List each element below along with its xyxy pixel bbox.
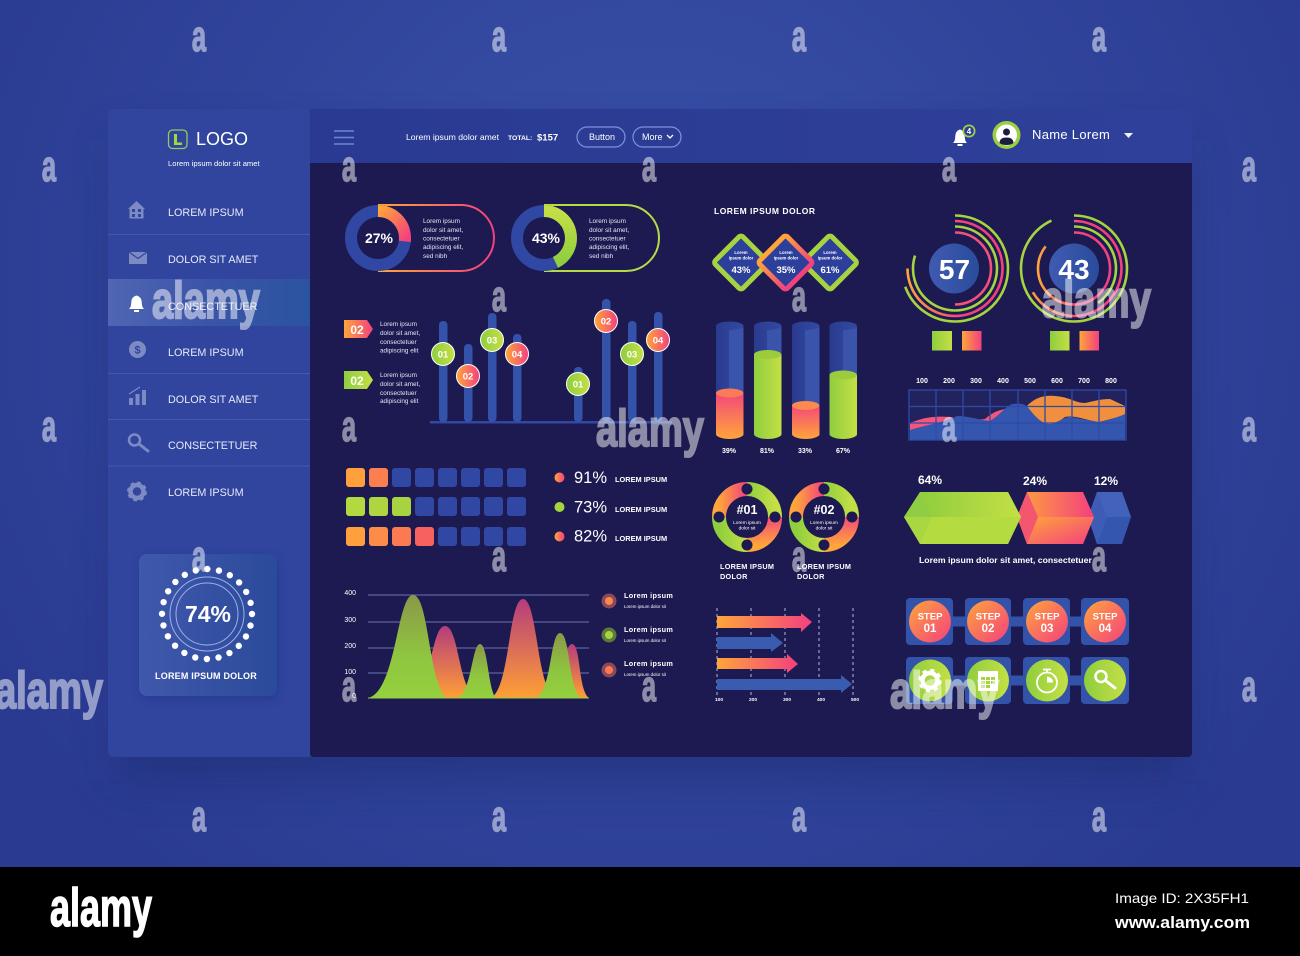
nav item: settings	[128, 483, 244, 500]
watermark: a	[942, 401, 957, 451]
icon tiles	[906, 657, 1129, 704]
grid area chart: 600	[1051, 378, 1063, 385]
lollipop bar chart: 03	[487, 336, 497, 346]
watermark: a	[642, 661, 657, 711]
arrow bar chart: 500	[851, 697, 859, 703]
donut description: dolor sit amet,	[589, 227, 629, 234]
nav highlight	[108, 279, 310, 326]
watermark: a	[342, 141, 357, 191]
donut card: 43%	[517, 205, 659, 271]
hexagon proportion bar: 12%	[1094, 474, 1118, 488]
diamonds: ipsum dolor	[818, 256, 843, 260]
button	[577, 127, 625, 147]
panel: top bar	[310, 109, 1192, 163]
cylinder chart: 39%	[722, 448, 737, 455]
legend tag: green 02: dolor sit amet,	[380, 381, 420, 388]
watermark: alamy	[596, 400, 704, 458]
icon: search	[1096, 671, 1115, 688]
gauge swatches	[1050, 331, 1099, 350]
panel: main dashboard area	[310, 150, 1192, 757]
ring: #01: #01	[737, 503, 757, 517]
hexagon proportion bar	[904, 473, 1131, 544]
nav item: dollar: $	[134, 344, 141, 356]
donut description: sed nibh	[589, 253, 614, 260]
logo: LOGO	[196, 129, 248, 149]
step tiles: 03	[1041, 623, 1053, 635]
diamonds: ipsum dolor	[774, 256, 799, 260]
progress legend	[554, 469, 667, 546]
nav item: chart	[129, 387, 259, 406]
total	[508, 132, 558, 144]
hexagon caption: Lorem ipsum dolor sit amet, consectetuer	[919, 555, 1092, 565]
nav item: bell active: CONSECTETUER	[168, 301, 258, 313]
button: more	[633, 127, 681, 147]
watermark: a	[642, 141, 657, 191]
progress legend: 91%	[574, 469, 607, 487]
total: $157	[537, 132, 558, 144]
watermark: a	[1242, 401, 1257, 451]
footer bar: Image ID: 2X35FH1	[1115, 890, 1249, 906]
donut description	[423, 218, 463, 260]
step tiles: STEP	[918, 612, 943, 622]
donut description: consectetuer	[589, 236, 626, 242]
ring: #01: Lorem ipsum	[733, 520, 761, 526]
diamonds	[713, 235, 858, 290]
grid area chart: 300	[970, 378, 982, 385]
nav item: home	[128, 201, 244, 219]
watermark: alamy	[152, 272, 260, 330]
nav item: mail: DOLOR SIT AMET	[168, 254, 259, 266]
grid area chart: 200	[943, 378, 955, 385]
icon: dropdown caret	[1124, 133, 1133, 138]
gauge swatches	[932, 331, 982, 350]
grid area chart: 800	[1105, 378, 1117, 385]
diamonds: 61%	[820, 265, 840, 276]
step tiles: 02	[982, 623, 994, 635]
watermark: a	[192, 531, 207, 581]
nav item: search	[129, 434, 258, 452]
lollipop bar chart: 01	[438, 350, 449, 360]
icon: stopwatch	[1037, 670, 1057, 692]
area chart legend	[602, 591, 673, 678]
cylinder chart: 67%	[836, 448, 851, 455]
grid area chart: 100	[916, 378, 928, 385]
nav item: search: CONSECTETUER	[168, 440, 258, 452]
icon: gear	[920, 670, 940, 690]
watermark: a	[792, 11, 807, 61]
arrow bar chart: 200	[749, 697, 757, 703]
step tiles	[906, 598, 1129, 645]
area chart legend: Lorem ipsum	[624, 659, 673, 668]
donut description: dolor sit amet,	[423, 227, 463, 234]
area chart legend: Lorem ipsum dolor sit	[624, 604, 667, 609]
footer bar: alamy	[50, 878, 152, 938]
lollipop bar chart	[430, 299, 672, 424]
gauge card	[139, 554, 277, 698]
radial gauge: 43: 43	[1058, 254, 1090, 285]
watermark: alamy	[1042, 271, 1151, 329]
icon: calendar	[978, 671, 998, 691]
radial gauge: 57: 57	[939, 254, 970, 285]
nav item: dollar: LOREM IPSUM	[168, 347, 244, 359]
watermark: a	[192, 791, 207, 841]
arrow bar chart	[715, 608, 859, 703]
gauge card: 74%	[185, 601, 231, 627]
logo tagline: Lorem ipsum dolor sit amet	[168, 159, 260, 168]
ring: #02: #02	[814, 503, 834, 517]
ring labels: LOREM IPSUM	[720, 562, 774, 571]
legend tag: orange 02: adipiscing elit	[380, 348, 419, 354]
watermark: a	[1092, 11, 1107, 61]
radial gauge: 43	[1021, 216, 1127, 322]
logo	[168, 129, 248, 149]
donut description: Lorem ipsum	[589, 218, 626, 225]
diamonds: Lorem	[779, 250, 793, 255]
watermark: a	[342, 661, 357, 711]
ring: #01: dolor sit	[739, 526, 756, 532]
total: TOTAL:	[508, 135, 532, 142]
ring: #01	[714, 484, 780, 550]
grid area chart: 400	[997, 378, 1009, 385]
nav item: dollar	[129, 341, 244, 359]
watermark: a	[1242, 661, 1257, 711]
step tiles: STEP	[1035, 612, 1060, 622]
radial gauge: 57	[902, 216, 1008, 322]
legend tag: green 02: adipiscing elit	[380, 398, 419, 405]
legend tag: green 02: Lorem ipsum	[380, 372, 417, 379]
watermark: a	[492, 791, 507, 841]
footer bar: www.alamy.com	[1114, 913, 1250, 932]
legend tag: green 02	[344, 371, 420, 405]
watermark: alamy	[890, 662, 999, 720]
progress legend: LOREM IPSUM	[615, 534, 667, 543]
ring labels	[720, 562, 851, 581]
area chart: 400	[344, 590, 356, 597]
watermark: a	[342, 401, 357, 451]
donut card: 43%: 43%	[532, 230, 561, 246]
donut description: Lorem ipsum	[423, 218, 460, 225]
icon: notification bell	[953, 124, 976, 146]
donut card: 27%: 27%	[365, 230, 394, 246]
watermark: a	[1092, 791, 1107, 841]
watermark: a	[1092, 531, 1107, 581]
icon: menu	[334, 131, 354, 144]
diamonds: Lorem	[823, 250, 837, 255]
area chart: 300	[344, 617, 356, 624]
hexagon proportion bar: 24%	[1023, 474, 1047, 488]
donut description: sed nibh	[423, 253, 448, 260]
panel: sidebar	[108, 109, 310, 757]
area chart: 100	[344, 669, 356, 676]
watermark: a	[192, 11, 207, 61]
arrow bar chart: 100	[715, 697, 723, 703]
donut description: adipiscing elit,	[423, 244, 463, 251]
legend tag: orange 02: consectetuer	[380, 339, 417, 346]
nav item: settings: LOREM IPSUM	[168, 487, 244, 499]
diamonds: Lorem	[734, 250, 748, 255]
grid area chart	[909, 378, 1126, 440]
area chart legend: Lorem ipsum dolor sit	[624, 672, 667, 677]
step tiles: 04	[1099, 623, 1112, 635]
watermark: a	[1242, 141, 1257, 191]
progress legend: LOREM IPSUM	[615, 475, 667, 484]
watermark: a	[792, 791, 807, 841]
heading: lorem ipsum dolor: LOREM IPSUM DOLOR	[714, 206, 816, 216]
watermark: a	[792, 271, 807, 321]
step tiles: STEP	[976, 612, 1001, 622]
watermark: a	[492, 531, 507, 581]
icon: notification bell: 4	[967, 127, 972, 136]
cylinder chart: 81%	[760, 448, 775, 455]
diamonds: ipsum dolor	[729, 256, 754, 260]
arrow bar chart: 300	[783, 697, 791, 703]
watermark: a	[942, 141, 957, 191]
step tiles: 01	[924, 623, 937, 635]
ring: #02: Lorem ipsum	[810, 520, 838, 526]
nav item: chart: DOLOR SIT AMET	[168, 394, 259, 406]
ring labels: DOLOR	[797, 572, 825, 581]
watermark: a	[792, 531, 807, 581]
donut description: adipiscing elit,	[589, 244, 629, 251]
lollipop bar chart: 04	[653, 336, 664, 346]
legend tag: orange 02: 02	[350, 323, 364, 337]
nav item: bell active	[129, 296, 258, 313]
donut description	[589, 218, 629, 260]
square progress grid	[346, 468, 526, 546]
lollipop bar chart: 03	[627, 350, 637, 360]
diamonds: 43%	[731, 265, 751, 276]
gauge card: LOREM IPSUM DOLOR	[155, 671, 257, 681]
lollipop bar chart: 02	[463, 372, 473, 382]
progress legend: 82%	[574, 528, 607, 546]
area chart: 200	[344, 643, 356, 650]
watermark: a	[492, 271, 507, 321]
cylinder chart	[716, 322, 857, 455]
watermark: a	[42, 141, 57, 191]
top bar summary text: Lorem ipsum dolor amet	[406, 132, 500, 142]
legend tag: orange 02: dolor sit amet,	[380, 330, 420, 337]
area chart	[344, 590, 589, 700]
legend tag: green 02: consectetuer	[380, 390, 417, 397]
watermark: a	[492, 11, 507, 61]
ring labels: DOLOR	[720, 572, 748, 581]
lollipop bar chart: 01	[573, 380, 584, 390]
donut description: consectetuer	[423, 236, 460, 242]
ring labels: LOREM IPSUM	[797, 562, 851, 571]
area chart legend: Lorem ipsum dolor sit	[624, 638, 667, 643]
nav item: mail	[129, 252, 259, 266]
icon: avatar	[992, 121, 1020, 149]
area chart legend: Lorem ipsum	[624, 625, 673, 634]
button: Button	[589, 132, 615, 142]
user name: Name Lorem	[1032, 127, 1110, 142]
diamonds: 35%	[776, 265, 796, 276]
hexagon proportion bar: 64%	[918, 473, 942, 487]
legend tag: green 02: 02	[350, 374, 364, 388]
button: more: More	[642, 132, 663, 142]
step tiles: STEP	[1093, 612, 1118, 622]
lollipop bar chart: 04	[512, 350, 523, 360]
ring: #02: dolor sit	[816, 526, 833, 532]
legend tag: orange 02: Lorem ipsum	[380, 321, 417, 328]
grid area chart: 700	[1078, 378, 1090, 385]
footer bar	[0, 867, 1300, 956]
area chart legend: Lorem ipsum	[624, 591, 673, 600]
lollipop bar chart: 02	[601, 316, 611, 328]
area chart: 0	[352, 693, 356, 700]
progress legend: 73%	[574, 498, 607, 516]
ring: #02	[790, 484, 858, 550]
watermark: a	[42, 401, 57, 451]
arrow bar chart: 400	[817, 697, 825, 703]
grid area chart: 500	[1024, 378, 1036, 385]
nav item: home: LOREM IPSUM	[168, 207, 244, 219]
donut card: 27%	[351, 205, 494, 271]
cylinder chart: 33%	[798, 448, 813, 455]
progress legend: LOREM IPSUM	[615, 505, 667, 514]
legend tag: orange 02	[344, 320, 420, 354]
